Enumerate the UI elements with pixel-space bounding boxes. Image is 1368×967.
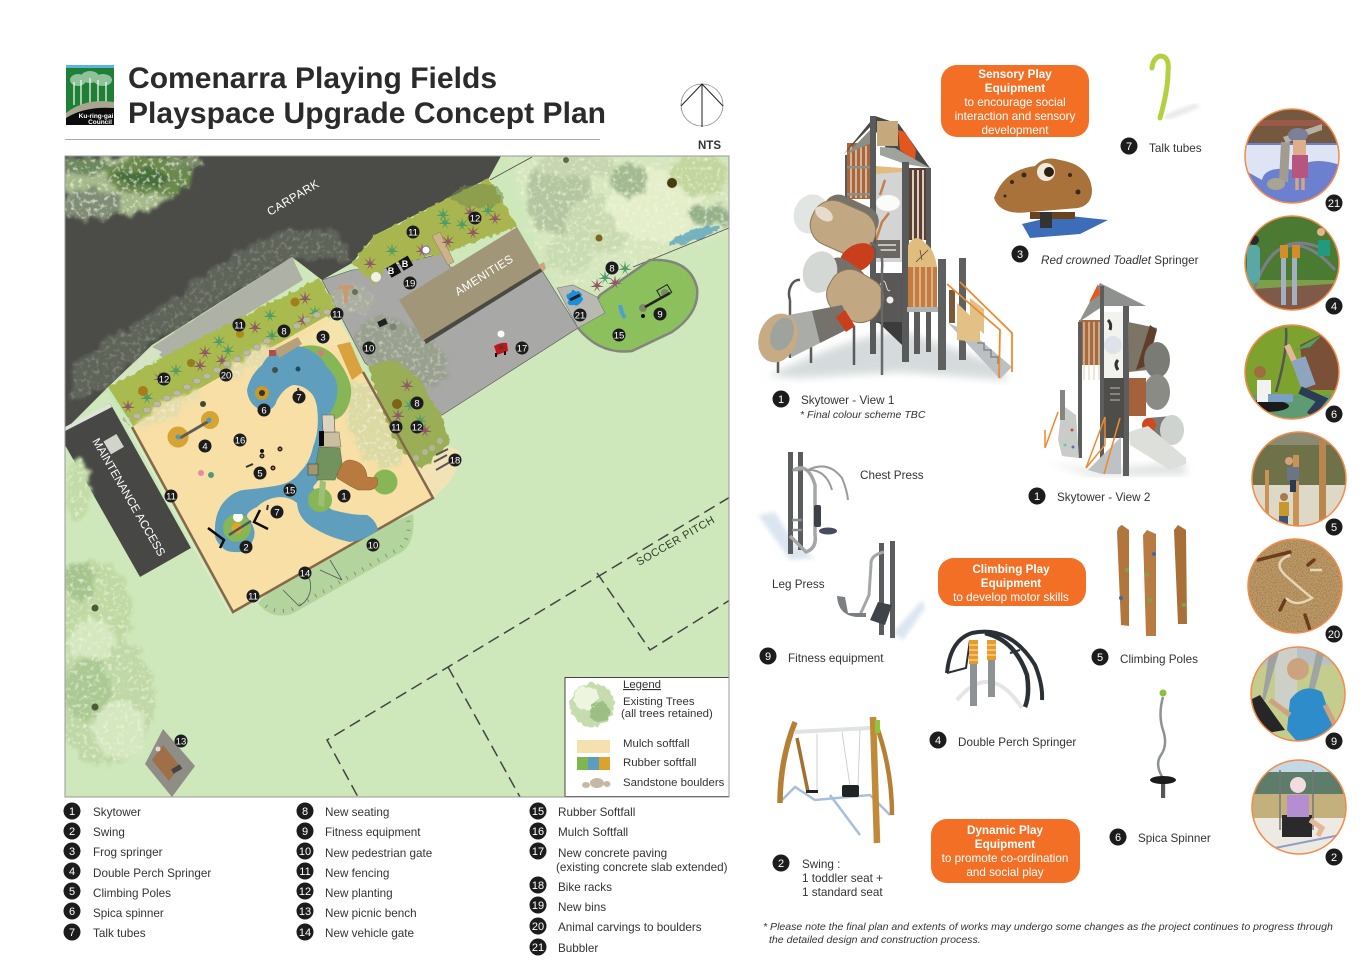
skytower view 1 label: Skytower - View 1 bbox=[801, 394, 894, 407]
plan number markers: 8 bbox=[414, 398, 420, 410]
north arrow bbox=[681, 84, 723, 152]
plan number markers: 11 bbox=[408, 228, 418, 238]
plan key column 3: 21 bbox=[532, 942, 544, 954]
plan key column 2: New seating bbox=[325, 806, 389, 819]
double perch springer label bbox=[930, 732, 1076, 749]
plan key column 2: 13 bbox=[299, 906, 311, 918]
plan legend: (all trees retained) bbox=[621, 708, 713, 720]
plan number markers: 18 bbox=[450, 456, 460, 466]
plan number markers bbox=[158, 212, 666, 748]
leg press illustration bbox=[837, 541, 925, 640]
dynamic play callout: Equipment bbox=[975, 838, 1035, 851]
leg press label: Leg Press bbox=[772, 578, 825, 591]
toadlet springer label bbox=[1012, 246, 1199, 267]
plan number markers: 11 bbox=[234, 320, 244, 332]
play equipment and people in softfall bbox=[198, 337, 324, 510]
double perch springer label: Double Perch Springer bbox=[958, 736, 1076, 749]
talk tubes label bbox=[1120, 138, 1202, 155]
plan key column 3: (existing concrete slab extended) bbox=[556, 861, 728, 874]
fitness zone rubber pad bbox=[557, 260, 697, 352]
tree shadow over carpark bbox=[72, 228, 352, 400]
posts bbox=[870, 116, 876, 354]
climbing play callout: to develop motor skills bbox=[953, 591, 1069, 604]
title: Comenarra Playing Fields bbox=[128, 62, 497, 95]
photo number badges: 21 bbox=[1328, 198, 1340, 210]
skytower view 1 label bbox=[772, 390, 926, 421]
plan number markers: 2 bbox=[243, 542, 249, 554]
council logo: Ku-ring-gai bbox=[79, 113, 114, 120]
swing label: Swing : bbox=[802, 858, 840, 871]
picnic bench pad bbox=[145, 729, 195, 797]
plan key column 3: New bins bbox=[558, 901, 606, 914]
plan number markers: 8 bbox=[609, 264, 615, 274]
plan number markers: 1 bbox=[341, 492, 347, 502]
soccer pitch label: SOCCER PITCH bbox=[634, 514, 717, 569]
swing illustration bbox=[780, 717, 892, 843]
toadlet springer label: Red crowned Toadlet Springer bbox=[1041, 254, 1199, 267]
right slats bbox=[908, 168, 927, 240]
talk tubes label: Talk tubes bbox=[1149, 142, 1202, 155]
climbing play callout: Equipment bbox=[981, 577, 1041, 590]
plan key column 1: 1 bbox=[69, 806, 75, 818]
plan key column 2: 9 bbox=[302, 826, 308, 838]
plan key column 1 bbox=[64, 802, 211, 940]
plan key column 1: Skytower bbox=[93, 806, 141, 819]
double perch springer label: 4 bbox=[935, 735, 941, 747]
plan key column 1: 3 bbox=[69, 846, 75, 858]
eastern planting bed and bike racks bbox=[367, 360, 458, 498]
spica spinner label: Spica Spinner bbox=[1138, 832, 1211, 845]
spica spinner illustration bbox=[1150, 690, 1176, 798]
sensory play callout: to encourage social bbox=[964, 96, 1066, 109]
dynamic play callout bbox=[931, 819, 1080, 883]
photo 5 climbing poles bbox=[1250, 430, 1350, 530]
title bbox=[128, 62, 606, 130]
chest press label: Chest Press bbox=[860, 469, 924, 482]
plan key column 1: 2 bbox=[69, 826, 75, 838]
skytower view 2 illustration bbox=[1045, 283, 1186, 476]
red crowned toadlet springer illustration bbox=[994, 158, 1108, 238]
lower panel bbox=[876, 273, 903, 323]
plan key column 3: 19 bbox=[532, 900, 544, 912]
plan number markers: 20 bbox=[221, 370, 231, 382]
south western planting bed bbox=[107, 278, 338, 428]
fitness equipment label: 9 bbox=[765, 651, 771, 663]
photo 4 perch springer bbox=[1240, 215, 1345, 315]
amenities building: AMENITIES bbox=[453, 252, 516, 299]
centre panel bbox=[875, 172, 903, 262]
sensory play callout: interaction and sensory bbox=[955, 110, 1076, 123]
tree overlay on paving bbox=[329, 284, 450, 388]
plan number markers: 4 bbox=[202, 442, 208, 452]
plan number markers: 21 bbox=[575, 310, 585, 322]
fitness equipment label bbox=[760, 648, 884, 665]
grey footpath strip bbox=[152, 257, 303, 363]
plan key column 2 bbox=[296, 802, 432, 940]
plan number markers: 11 bbox=[332, 310, 342, 320]
disclaimer note: the detailed design and construction process. bbox=[769, 934, 981, 946]
plan number markers: 10 bbox=[368, 540, 378, 552]
fitness equipment label: Fitness equipment bbox=[788, 652, 884, 665]
plan legend: Existing Trees bbox=[623, 696, 695, 708]
climbing poles label bbox=[1092, 648, 1198, 666]
plan number markers: 7 bbox=[296, 392, 302, 404]
toadlet springer label: 3 bbox=[1017, 249, 1023, 261]
plan number markers: 8 bbox=[281, 326, 287, 338]
boulder swatch bbox=[582, 778, 610, 788]
sensory play callout: Sensory Play bbox=[978, 68, 1052, 81]
plan number markers: 3 bbox=[320, 332, 326, 344]
plan key column 2: New planting bbox=[325, 887, 393, 900]
spica spinner label: 6 bbox=[1115, 832, 1121, 844]
plan key column 2: Fitness equipment bbox=[325, 826, 421, 839]
plan legend: Legend bbox=[623, 679, 661, 691]
plan number markers: 19 bbox=[405, 278, 415, 290]
sensory play callout bbox=[941, 65, 1089, 137]
plan number markers: 12 bbox=[470, 214, 480, 224]
skytower view 1 label: * Final colour scheme TBC bbox=[800, 409, 926, 421]
roof bbox=[843, 116, 930, 168]
people on paving bbox=[337, 285, 508, 357]
concrete paving bbox=[322, 253, 578, 415]
plan key column 1: Swing bbox=[93, 826, 125, 839]
climbing poles label: Climbing Poles bbox=[1120, 653, 1198, 666]
perch springer pads bbox=[168, 411, 219, 448]
fence bbox=[132, 372, 433, 612]
talk tubes illustration bbox=[1152, 56, 1198, 118]
bin icons: B bbox=[402, 259, 409, 269]
lower left tree canopy bbox=[52, 458, 155, 766]
soft gate bay bbox=[258, 514, 414, 616]
climbing poles label: 5 bbox=[1097, 652, 1103, 664]
plan key column 1: Spica spinner bbox=[93, 907, 164, 920]
plan key column 1: Talk tubes bbox=[93, 927, 146, 940]
plan key column 2: New pedestrian gate bbox=[325, 847, 432, 860]
photo 21 bubbler bbox=[1240, 105, 1345, 210]
council logo: Council bbox=[88, 119, 112, 126]
plan key column 3: Animal carvings to boulders bbox=[558, 921, 702, 934]
plan key column 1: Climbing Poles bbox=[93, 887, 171, 900]
plan key column 3: 18 bbox=[532, 880, 544, 892]
plan key column 2: New fencing bbox=[325, 867, 389, 880]
plan key column 2: New picnic bench bbox=[325, 907, 417, 920]
carpark surface bbox=[65, 156, 501, 430]
plan key column 2: 8 bbox=[302, 806, 308, 818]
bin icons bbox=[386, 256, 413, 278]
plan number markers: 15 bbox=[614, 330, 624, 342]
photo 2 swing bbox=[1250, 758, 1350, 858]
amenities building bbox=[399, 227, 546, 344]
plan key column 2: 10 bbox=[299, 846, 311, 858]
legend tree swatch bbox=[570, 683, 614, 727]
plan key column 1: 5 bbox=[69, 886, 75, 898]
sensory play callout: development bbox=[982, 124, 1049, 137]
spica pad bbox=[255, 386, 269, 400]
spica spinner label bbox=[1110, 828, 1211, 846]
boulder row bbox=[123, 309, 331, 422]
plan key column 1: 6 bbox=[69, 906, 75, 918]
site plan bbox=[52, 153, 732, 797]
plan key column 2: New vehicle gate bbox=[325, 927, 414, 940]
bin icons: B bbox=[388, 266, 395, 276]
photo number badges: 4 bbox=[1331, 301, 1337, 313]
photo 20 animal carving bbox=[1245, 535, 1345, 635]
plan legend: Mulch softfall bbox=[623, 738, 689, 750]
disclaimer note bbox=[763, 921, 1333, 946]
tan leaf panel bbox=[908, 238, 937, 267]
photo number badges: 6 bbox=[1331, 409, 1337, 421]
climbing play callout: Climbing Play bbox=[972, 563, 1050, 576]
stairs bbox=[948, 323, 1012, 379]
skytower view 2 label: Skytower - View 2 bbox=[1057, 491, 1150, 504]
plan number markers: 11 bbox=[248, 592, 258, 602]
climbing poles illustration bbox=[1117, 525, 1187, 636]
rubber swatch bbox=[577, 757, 610, 770]
plan number markers: 13 bbox=[176, 736, 186, 748]
slats left wall bbox=[847, 143, 872, 199]
plan number markers: 9 bbox=[657, 310, 663, 320]
plan number markers: 12 bbox=[159, 374, 169, 386]
plan legend: Sandstone boulders bbox=[623, 777, 725, 789]
carpark label: CARPARK bbox=[265, 177, 321, 219]
skytower view 1 illustration bbox=[752, 116, 1012, 380]
spiral slide tubes bbox=[814, 190, 884, 250]
chest press illustration bbox=[758, 452, 848, 560]
plan key column 3: New concrete paving bbox=[558, 847, 667, 860]
mulch softfall bbox=[132, 316, 433, 612]
plan key column 2: 11 bbox=[299, 866, 311, 878]
swing label: 1 toddler seat + bbox=[802, 872, 883, 885]
photo number badges bbox=[1326, 194, 1342, 866]
skytower view 1 label: 1 bbox=[778, 394, 784, 406]
photo number badges: 9 bbox=[1331, 736, 1337, 748]
upper right tree canopy bbox=[510, 153, 732, 290]
plan key column 3: 16 bbox=[532, 826, 544, 838]
plan legend bbox=[565, 678, 729, 796]
mulch swatch bbox=[577, 740, 610, 753]
dynamic play callout: to promote co-ordination bbox=[942, 852, 1068, 865]
plan key column 3: 20 bbox=[532, 921, 544, 933]
plan legend: Rubber softfall bbox=[623, 757, 696, 769]
mottled tree cover on softfall bbox=[134, 342, 404, 470]
plan number markers: 5 bbox=[257, 468, 263, 480]
plan key column 3: 17 bbox=[532, 846, 544, 858]
plan number markers: 15 bbox=[285, 486, 295, 496]
swing label: 1 standard seat bbox=[802, 886, 883, 899]
talk tubes label: 7 bbox=[1126, 141, 1132, 153]
plan key column 3: Rubber Softfall bbox=[558, 806, 635, 819]
dynamic play callout: and social play bbox=[966, 866, 1044, 879]
plan key column 3 bbox=[530, 802, 728, 956]
title: Playspace Upgrade Concept Plan bbox=[128, 97, 606, 130]
skytower view 2 label: 1 bbox=[1034, 491, 1040, 503]
plan key column 1: 4 bbox=[69, 866, 75, 878]
climbing play callout bbox=[938, 558, 1086, 606]
plan key column 1: Frog springer bbox=[93, 846, 163, 859]
north arrow: NTS bbox=[698, 140, 721, 152]
double perch springer illustration bbox=[947, 632, 1042, 708]
skytower footprint bbox=[308, 415, 398, 512]
plan number markers: 12 bbox=[412, 422, 422, 434]
photo number badges: 5 bbox=[1331, 522, 1337, 534]
photo number badges: 20 bbox=[1328, 629, 1340, 641]
plan number markers: 7 bbox=[274, 508, 280, 518]
soccer pitch markings bbox=[327, 497, 730, 797]
dynamic play callout: Dynamic Play bbox=[967, 824, 1044, 837]
skytower view 2 label bbox=[1028, 488, 1150, 504]
top left tree canopy bbox=[62, 155, 203, 221]
council logo bbox=[66, 65, 114, 126]
plan key column 2: 12 bbox=[299, 886, 311, 898]
plan number markers: 17 bbox=[517, 344, 527, 354]
swing label bbox=[772, 854, 883, 899]
photo number badges: 2 bbox=[1331, 852, 1337, 864]
disclaimer note: * Please note the final plan and extents of works may undergo some changes as the project continues to progress through bbox=[763, 921, 1333, 933]
swing pad bbox=[208, 510, 268, 548]
rubber softfall river bbox=[215, 346, 378, 552]
photo 6 spica spinner bbox=[1240, 320, 1345, 425]
plan key column 3: Bike racks bbox=[558, 881, 612, 894]
plan number markers: 14 bbox=[300, 568, 310, 580]
plan key column 3: 15 bbox=[532, 806, 544, 818]
plan key column 3: Bubbler bbox=[558, 942, 598, 955]
plan key column 1: Double Perch Springer bbox=[93, 867, 211, 880]
plan number markers: 16 bbox=[235, 436, 245, 446]
swing label: 2 bbox=[778, 858, 784, 870]
frog zone rubber bbox=[300, 317, 363, 420]
sensory play callout: Equipment bbox=[985, 82, 1045, 95]
plan number markers: 6 bbox=[261, 406, 267, 416]
photo 9 fitness user bbox=[1250, 645, 1350, 745]
plan key column 1: 7 bbox=[69, 927, 75, 939]
plan key column 2: 14 bbox=[299, 927, 311, 939]
northern planting bed bbox=[352, 178, 517, 285]
plan key column 3: Mulch Softfall bbox=[558, 826, 628, 839]
bubbler bbox=[567, 290, 583, 306]
maintenance access drive: MAINTENANCE ACCESS bbox=[89, 436, 168, 559]
plan number markers: 11 bbox=[166, 492, 176, 502]
maintenance access drive bbox=[65, 403, 191, 577]
plan number markers: 10 bbox=[364, 344, 374, 354]
plan number markers: 11 bbox=[391, 422, 401, 434]
